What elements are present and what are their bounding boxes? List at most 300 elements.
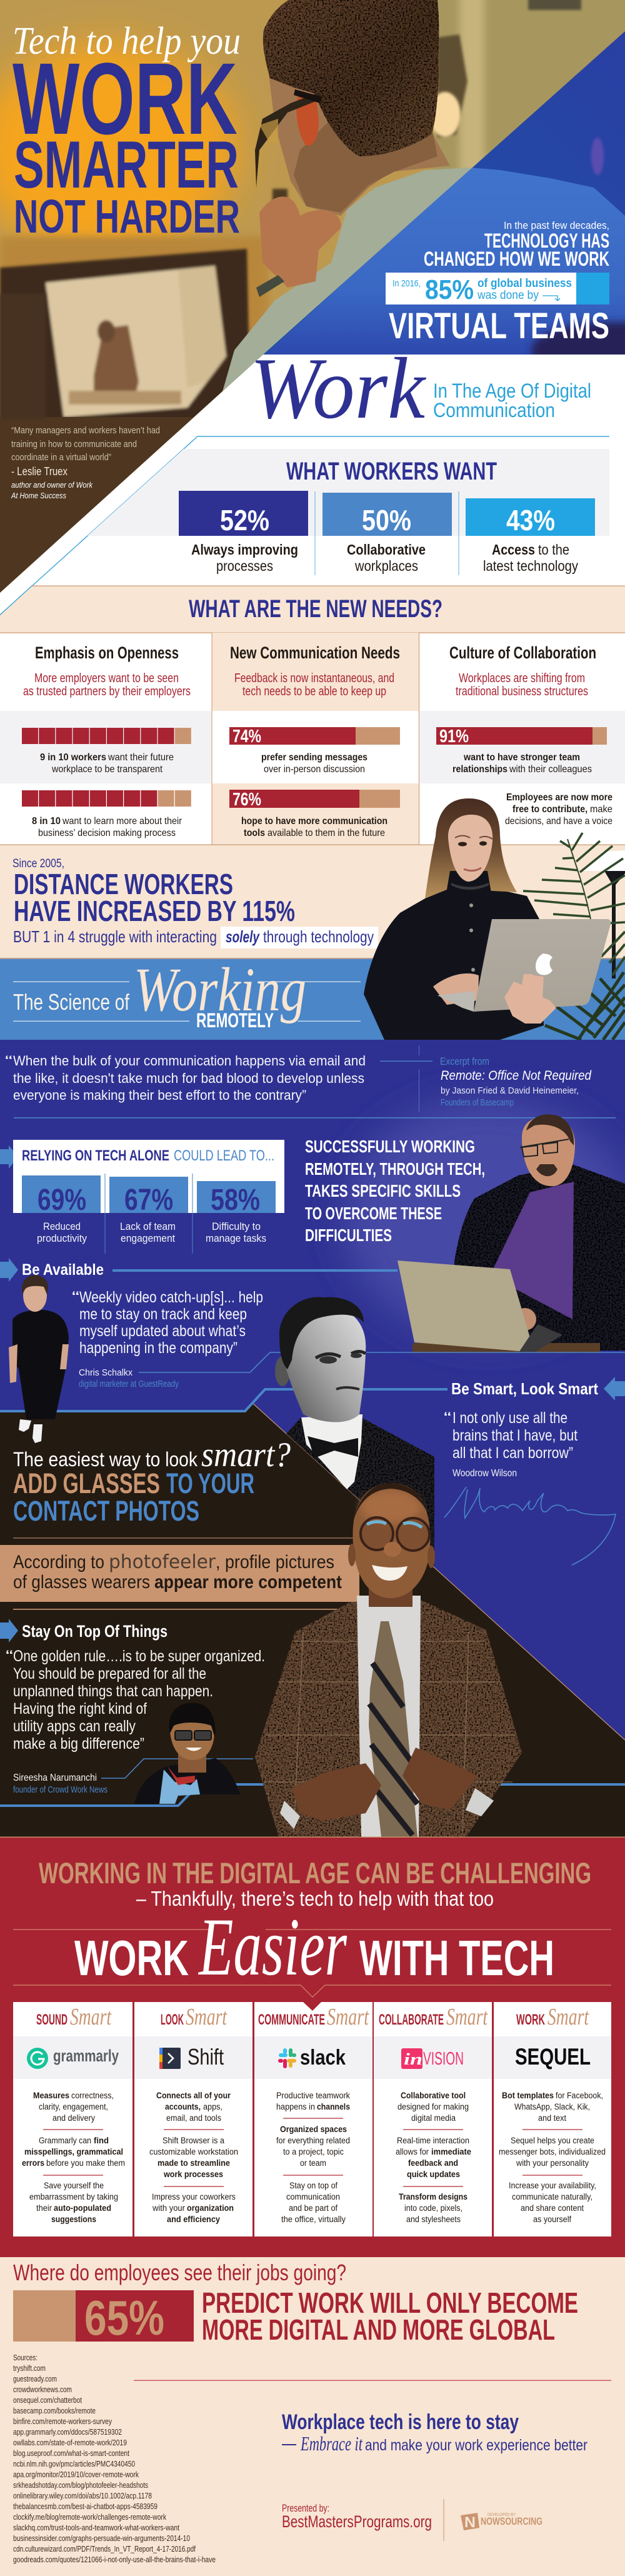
card copy: Increase your availability,: [509, 2181, 596, 2190]
card heading: [36, 2004, 112, 2030]
bar: 69%: [22, 1175, 101, 1217]
card heading: SOUND: [36, 2011, 68, 2028]
panel: photofeeler callout: appear more competent: [154, 1572, 342, 1592]
quote: Weekly video catch-up[s]... help: [79, 1289, 263, 1306]
quote: all that I can borrow”: [452, 1444, 573, 1462]
label: lack of team engagement: Lack of team: [120, 1220, 176, 1232]
card: work smart sequel: [499, 2004, 606, 2224]
bar: 43%: [466, 498, 595, 536]
quote: brains that I have, but: [452, 1427, 578, 1444]
text: employees are freer: decisions, and have a voice: [505, 816, 612, 827]
monitor in background: [0, 249, 250, 438]
section heading: Work in the age of digital communication: Communication: [433, 399, 555, 421]
card copy: Productive teamwork: [276, 2091, 350, 2100]
panel: hero photo: [0, 0, 625, 605]
heading: The Science of: [13, 989, 130, 1015]
bar: 67%: [109, 1177, 188, 1217]
panel: tech cards background: [13, 2002, 611, 2236]
card copy: correctness,: [71, 2091, 114, 2100]
logo: sequel: SEQUEL: [515, 2044, 591, 2070]
label: access: Access: [492, 541, 535, 558]
card copy: and be part of: [289, 2203, 338, 2213]
title: work easier with tech: Easier: [198, 1901, 347, 1993]
script word: Working: [134, 955, 306, 1024]
panel: photofeeler callout: [0, 1545, 359, 1602]
card copy: before you make them: [46, 2158, 125, 2168]
stat: 65%: 65%: [84, 2290, 164, 2345]
card copy: auto-populated: [54, 2203, 111, 2213]
label: lack of team engagement: [120, 1220, 176, 1244]
card copy: email, and tools: [166, 2113, 221, 2123]
headline: [14, 868, 295, 927]
text block: successfully working remotely: SUCCESSFULLY WORKING: [305, 1137, 475, 1156]
icon: arrow: [0, 1258, 18, 1282]
card copy: [276, 2091, 350, 2224]
hero title: [12, 20, 241, 243]
quote: [444, 1409, 578, 1462]
card copy: and stylesheets: [406, 2215, 461, 2224]
headline: HAVE INCREASED BY 115%: [14, 895, 295, 927]
heading: COULD LEAD TO...: [174, 1147, 274, 1164]
section heading: Work in the age of digital communication: [250, 340, 591, 437]
card copy: Connects all of your: [156, 2091, 231, 2100]
text: employees are freer: Employees are now more: [506, 792, 612, 803]
text block: sources: businessinsider.com/graphs-persuade-win-arguments-2014-10: [13, 2533, 190, 2543]
card copy: find: [94, 2136, 109, 2145]
logo: grammarly: [27, 2046, 119, 2069]
text block: sources: guestready.com: [13, 2374, 57, 2383]
logo: slack: [278, 2046, 346, 2070]
attribution: Woodrow Wilson: [452, 1468, 517, 1479]
stat: 65%: [13, 2290, 194, 2345]
logo: nowsourcing: DEVELOPED BY: [488, 2512, 516, 2517]
stat box: [386, 273, 609, 305]
text block: sources: ncbi.nlm.nih.gov/pmc/articles/PMC4340450: [13, 2459, 135, 2468]
card: sound smart grammarly: [22, 2004, 125, 2224]
WORK: WORK: [12, 41, 238, 156]
photo: Woodrow Wilson: [275, 1297, 434, 1566]
panel: photofeeler callout: photofeeler: [109, 1551, 216, 1573]
quote: make a big difference”: [13, 1735, 144, 1753]
card copy: digital media: [411, 2113, 456, 2123]
text block: workplace tech is here to stay: and make your work experience better: [365, 2437, 588, 2454]
photo: Sireesha Narumanchi: [134, 1703, 240, 1804]
text block: predict work: [202, 2287, 578, 2346]
stat text: 76%: tools: [244, 828, 265, 838]
label: reduced productivity: Reduced: [43, 1220, 81, 1232]
bar: 52%: [179, 491, 308, 536]
text: employees are freer: free to contribute,: [512, 804, 588, 815]
stat text: 91%: relationships: [452, 764, 508, 775]
text block: sources: slackhq.com/trust-tools-and-teamwork-what-workers-want: [13, 2523, 179, 2532]
label: difficulty to manage tasks: manage tasks: [206, 1232, 266, 1244]
card copy: allows for: [396, 2147, 429, 2156]
subheading: [234, 672, 394, 698]
label: always improving: processes: [216, 558, 273, 574]
attribution: Chris Schalkx: [79, 1367, 132, 1378]
SMARTER: SMARTER: [14, 127, 239, 202]
text block: add glasses to your contact photos: smart?: [201, 1436, 291, 1474]
stat text: 91%: [452, 752, 592, 775]
text block: sources: cdn.culturewizard.com/PDF/Trends_In_VT_Report_4-17-2016.pdf: [13, 2544, 196, 2553]
quote: utility apps can really: [13, 1718, 136, 1735]
logo: nowsourcing: NOWSOURCING: [481, 2515, 542, 2527]
text block: Leslie Truex quote: At Home Success: [11, 491, 66, 500]
remotely: REMOTELY: [196, 1009, 274, 1032]
card copy: Measures: [33, 2091, 69, 2100]
panel: brown glasses section: [0, 1389, 625, 1838]
stat text: 74%: [261, 752, 368, 775]
card copy: made to streamline: [158, 2158, 230, 2168]
column: culture of collaboration: [436, 643, 612, 827]
card copy: embarrassment by taking: [29, 2192, 118, 2201]
struggle line: solely: [226, 927, 260, 946]
card copy: happens in: [276, 2102, 315, 2111]
section heading: Work in the age of digital communication: Work: [250, 340, 427, 437]
card copy: quick updates: [407, 2170, 460, 2179]
card copy: or team: [300, 2158, 326, 2168]
label: reduced productivity: productivity: [37, 1232, 87, 1244]
subheading: traditional business structures: [456, 685, 588, 698]
text block: sources: crowdworknews.com: [13, 2385, 72, 2394]
card copy: Organized spaces: [280, 2125, 347, 2134]
attribution: [79, 1367, 179, 1389]
card copy: their: [36, 2203, 52, 2213]
card copy: Save yourself the: [44, 2181, 104, 2190]
heading: Be Available: [22, 1261, 104, 1279]
subheading: [23, 672, 191, 698]
text: employees are freer: make: [590, 804, 612, 815]
card copy: WhatsApp, Slack, Kik,: [514, 2102, 590, 2111]
logo: invision: in: [404, 2050, 422, 2068]
label: always improving: Always improving: [191, 541, 298, 558]
struggle line: BUT 1 in 4 struggle with interacting: [13, 927, 217, 946]
text block: workplace tech is here to stay: [282, 2410, 588, 2455]
stat text: 9 in 10: want their future: [108, 752, 174, 763]
panel: relying on tech alone: [0, 1140, 284, 1254]
heading: RELYING ON TECH ALONE: [22, 1147, 169, 1164]
quote: You should be prepared for all the: [13, 1665, 206, 1683]
text block: successfully working remotely: TAKES SPECIFIC SKILLS: [305, 1181, 461, 1200]
text block: sources: onlinelibrary.wiley.com/doi/abs/10.1002/acp.1178: [13, 2491, 152, 2500]
logo: slack: slack: [300, 2046, 346, 2070]
card heading: WORK: [516, 2011, 545, 2028]
bar: 67%: 67%: [124, 1184, 173, 1217]
stat text: 9 in 10: [40, 752, 174, 775]
card copy: and share content: [521, 2203, 584, 2213]
card copy: with your personality: [516, 2158, 589, 2168]
chart: 8 in 10: [22, 790, 191, 807]
title: work easier with tech: WORK: [74, 1930, 189, 1986]
text block: sources: clockify.me/blog/remote-work/challenges-remote-work: [13, 2512, 166, 2522]
text block: Leslie Truex quote: “Many managers and workers haven’t had: [11, 425, 160, 436]
photo: smiling man in suit: [255, 1483, 522, 1837]
card copy: Grammarly can: [39, 2136, 91, 2145]
stat text: 91%: want to have stronger team: [463, 752, 580, 763]
quote: bad blood: “: [5, 1053, 12, 1069]
panel: science of working remotely: [0, 955, 625, 1040]
stat box: In 2016,: [392, 278, 421, 289]
label: collaborative: workplaces: [354, 558, 418, 574]
subheading: tech needs to be able to keep up: [242, 685, 386, 698]
stat text: 9 in 10: workplace to be transparent: [51, 764, 162, 775]
card copy: designed for making: [398, 2102, 469, 2111]
heading: Emphasis on Openness: [35, 643, 179, 662]
quote: unplanned things that can happen.: [13, 1683, 213, 1700]
headline: DISTANCE WORKERS: [14, 868, 233, 900]
bar: 43%: 43%: [506, 504, 555, 536]
quote: Having the right kind of: [13, 1700, 147, 1718]
card copy: work processes: [163, 2170, 223, 2179]
attribution: Sireesha Narumanchi: [13, 1773, 97, 1783]
logo: shift: Shift: [188, 2044, 224, 2070]
card copy: misspellings, grammatical: [24, 2147, 123, 2156]
text block: excerpt source: Remote: Office Not Required: [441, 1069, 592, 1083]
panel: photofeeler callout: of glasses wearers: [13, 1572, 150, 1592]
intro line: In the past few decades,: [504, 219, 609, 231]
text block: workplace tech is here to stay: Workplace tech is here to stay: [282, 2410, 519, 2434]
text block: sources: blog.useproof.com/what-is-smart-content: [13, 2448, 129, 2458]
card heading: COMMUNICATE: [258, 2011, 325, 2028]
panel: needs columns background: [0, 633, 625, 845]
attribution: [13, 1773, 108, 1795]
stat text: 76%: available to them in the future: [268, 828, 385, 838]
chart: 91%: [436, 727, 607, 747]
label: access: [483, 541, 578, 574]
stat text: 9 in 10: 9 in 10 workers: [40, 752, 106, 763]
text block: Leslie Truex quote: training in how to communicate and: [11, 439, 137, 450]
card heading: [258, 2004, 369, 2030]
chart: 9 in 10: [22, 728, 191, 744]
card copy: Collaborative tool: [401, 2091, 466, 2100]
label: difficulty to manage tasks: [206, 1220, 266, 1244]
card copy: communication: [286, 2192, 340, 2201]
card copy: channels: [317, 2102, 350, 2111]
panel: what are the new needs heading: [0, 585, 625, 633]
card copy: for everything related: [276, 2136, 350, 2145]
card copy: [22, 2091, 125, 2224]
panel: photofeeler callout: , profile pictures: [216, 1552, 334, 1572]
text block: sources: thebalancesmb.com/best-ai-chatbot-apps-4583959: [13, 2502, 158, 2511]
panel: stay on top of things: [0, 1619, 625, 1806]
icon: signature flourish: [444, 1487, 616, 1565]
card copy: Bot templates: [502, 2091, 554, 2100]
quote: happening in the company”: [79, 1339, 238, 1357]
quote: [72, 1289, 263, 1357]
card copy: organization: [187, 2203, 234, 2213]
card: communicate smart slack: [258, 2004, 369, 2224]
bar: 50%: 50%: [362, 504, 411, 536]
stat text: 91%: with their colleagues: [509, 764, 592, 775]
card heading: Smart: [548, 2004, 589, 2030]
stat box: of global business: [478, 277, 572, 290]
NOT HARDER: NOT HARDER: [14, 190, 240, 243]
card copy: and delivery: [52, 2113, 95, 2123]
logo: invision: [401, 2048, 464, 2069]
text block: sources: goodreads.com/quotes/121066-i-not-only-use-all-the-brains-that-i-have: [13, 2555, 216, 2564]
label: collaborative: Collaborative: [347, 541, 426, 558]
chart: 76%: 76%: [232, 790, 261, 810]
quote: “: [6, 1648, 13, 1665]
card heading: [161, 2004, 228, 2030]
card copy: Shift Browser is a: [162, 2136, 224, 2145]
card copy: [396, 2091, 471, 2224]
card copy: as yourself: [533, 2215, 571, 2224]
stat text: 76%: hope to have more communication: [241, 816, 388, 827]
card copy: into code, pixels,: [404, 2203, 462, 2213]
text block: workplace tech is here to stay: Embrace it: [300, 2432, 363, 2455]
photo: woman with laptop: [364, 798, 611, 1040]
text block: Leslie Truex quote: author and owner of Work: [11, 480, 93, 490]
quote: I not only use all the: [452, 1409, 568, 1427]
quote: One golden rule….is to be super organized.: [13, 1648, 265, 1665]
column: new communication needs: [229, 643, 400, 838]
icon: arrow: [0, 1619, 18, 1643]
man: neck, ear, hand, shirt, hair: [222, 0, 471, 391]
subheading: [456, 672, 588, 698]
label: lack of team engagement: engagement: [121, 1232, 175, 1244]
card copy: [149, 2091, 238, 2224]
since 2005: Since 2005,: [12, 857, 64, 870]
chart: 91%: 91%: [439, 727, 469, 747]
text block: sources: srkheadshotday.com/blog/photofeeler-headshots: [13, 2480, 148, 2490]
bar: 52%: 52%: [220, 504, 269, 536]
bar: 69%: 69%: [38, 1184, 86, 1217]
card: collaborate smart invision: [379, 2004, 488, 2224]
text block: sources: owllabs.com/state-of-remote-work/2019: [13, 2438, 127, 2447]
stat text: 8 in 10: [32, 816, 182, 838]
text block: excerpt source: Founders of Basecamp: [441, 1097, 514, 1108]
heading: Be Smart, Look Smart: [451, 1379, 598, 1398]
card copy: the office, virtually: [281, 2215, 346, 2224]
panel: blue diagonal: [263, 31, 625, 378]
card heading: Smart: [327, 2004, 369, 2030]
column: emphasis on openness: [22, 643, 191, 838]
card copy: with your: [152, 2203, 185, 2213]
label: reduced productivity: [37, 1220, 87, 1244]
card copy: communicate naturally,: [512, 2192, 592, 2201]
stat box: 85%: [425, 274, 474, 305]
quote: bad blood: everyone is making their best effort to the contrary”: [13, 1087, 306, 1103]
label: access: to the: [538, 541, 569, 558]
panel: distance workers: [0, 844, 625, 959]
photo: lamp and plant: [523, 833, 625, 1040]
card copy: clarity, engagement,: [39, 2102, 108, 2111]
card heading: Smart: [70, 2004, 112, 2030]
card copy: and efficiency: [167, 2215, 220, 2224]
card copy: to a project, topic: [283, 2147, 344, 2156]
stat text: 74%: over in-person discussion: [264, 764, 365, 775]
card copy: and text: [538, 2113, 566, 2123]
photo: man with laptop: [398, 1114, 625, 1353]
panel: navy remote-work section background: [0, 1040, 625, 1753]
text block: sources: tryshift.com: [13, 2363, 46, 2373]
chart: 74%: 74%: [232, 727, 261, 747]
text block: successfully working remotely: [305, 1137, 485, 1245]
heading: New Communication Needs: [230, 643, 400, 662]
stat text: 8 in 10: business’ decision making process: [38, 828, 176, 838]
logo: shift: [159, 2044, 224, 2070]
panel: be smart look smart: [366, 1377, 625, 1565]
label: difficulty to manage tasks: Difficulty to: [212, 1220, 261, 1232]
panel: be available: [0, 1258, 625, 1389]
card copy: customizable workstation: [149, 2147, 238, 2156]
text block: add glasses to your contact photos: TO YOUR: [166, 1467, 254, 1499]
card copy: Impress your coworkers: [152, 2192, 236, 2201]
panel: what workers want: [88, 449, 609, 575]
text block: sources: binfire.com/remote-workers-survey: [13, 2417, 112, 2426]
stat box: was done by: [477, 289, 539, 302]
text block: presented by: [282, 2502, 432, 2531]
card heading: LOOK: [161, 2011, 184, 2028]
card heading: [379, 2004, 488, 2030]
card heading: Smart: [186, 2004, 228, 2030]
text block: add glasses to your contact photos: The easiest way to look: [13, 1448, 198, 1471]
quote: [6, 1648, 265, 1753]
text block: successfully working remotely: TO OVERCOME THESE: [305, 1204, 442, 1223]
card heading: COLLABORATE: [379, 2011, 444, 2028]
card copy: apps,: [203, 2102, 222, 2111]
card copy: Stay on top of: [289, 2181, 338, 2190]
text block: excerpt source: Excerpt from: [440, 1055, 489, 1067]
card copy: Sequel helps you create: [511, 2136, 594, 2145]
card: look smart shift: [149, 2004, 238, 2224]
text block: Leslie Truex quote: - Leslie Truex: [11, 465, 68, 478]
card copy: errors: [22, 2158, 44, 2168]
quote: me to stay on track and keep: [79, 1306, 247, 1323]
heading: where do employees see their jobs going: Where do employees see their jobs going?: [13, 2260, 346, 2285]
subheading: Feedback is now instantaneous, and: [234, 672, 394, 685]
text block: successfully working remotely: REMOTELY, THROUGH TECH,: [305, 1159, 485, 1179]
logo: invision: VISION: [423, 2049, 464, 2069]
quote: bad blood: When the bulk of your communication happens via email and: [13, 1053, 366, 1069]
quote: myself updated about what’s: [79, 1322, 246, 1340]
text block: excerpt source: by Jason Fried & David Heinemeier,: [441, 1085, 579, 1096]
title: work easier with tech: [74, 1901, 554, 1993]
card copy: Transform designs: [399, 2192, 468, 2201]
label: access: latest technology: [483, 558, 578, 574]
label: collaborative: [347, 541, 426, 574]
struggle line: [13, 927, 378, 948]
struggle line: through technology: [263, 927, 374, 946]
stat text: 76%: [241, 816, 388, 838]
attribution: founder of Crowd Work News: [13, 1784, 108, 1795]
heading: Stay On Top Of Things: [22, 1622, 168, 1641]
stat text: 74%: prefer sending messages: [261, 752, 368, 763]
icon: arrow: [0, 1145, 18, 1169]
photo: Chris Schalkx: [9, 1275, 69, 1443]
stat text: 8 in 10: 8 in 10: [32, 816, 61, 827]
card copy: [499, 2091, 606, 2224]
script line: Tech to help you: [12, 20, 241, 63]
subheading: More employers want to be seen: [34, 672, 179, 685]
chart: 76%: [229, 790, 400, 810]
label: always improving: [191, 541, 298, 574]
panel: what are the new needs heading: WHAT ARE THE NEW NEEDS?: [189, 595, 442, 623]
panel: red tech section: [0, 1837, 625, 2257]
panel: photofeeler callout: According to: [13, 1552, 104, 1572]
panel: footer background: [0, 2257, 625, 2576]
logo: nowsourcing: [461, 2512, 542, 2531]
card heading: [516, 2004, 589, 2030]
text block: Leslie Truex quote: coordinate in a virtual world”: [11, 452, 111, 463]
card copy: immediate: [431, 2147, 471, 2156]
text block: sources: apa.org/monitor/2019/10/cover-remote-work: [13, 2470, 139, 2479]
text block: virtual teams: [386, 219, 609, 346]
section heading: Work in the age of digital communication: In The Age Of Digital: [433, 380, 591, 402]
text block: presented by: BestMastersPrograms.org: [282, 2512, 432, 2531]
card copy: Real-time interaction: [397, 2136, 469, 2145]
